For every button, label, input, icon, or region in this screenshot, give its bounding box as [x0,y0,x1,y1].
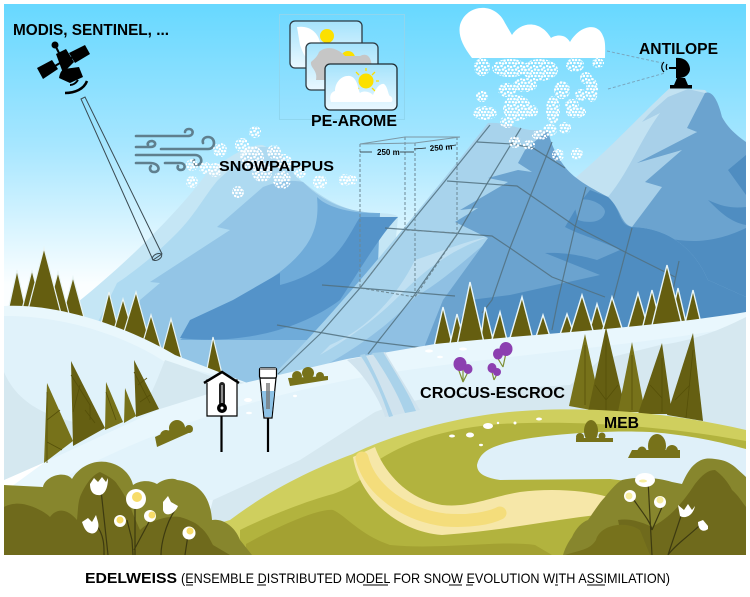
green meadow [213,409,746,555]
snow band [13,312,746,522]
central mountain [277,123,746,376]
wind icon [136,129,214,172]
grid cell 250 m box: 250 m [377,148,400,157]
bush cluster bottom left with flowers [4,462,252,555]
weather card: white cloud [325,64,397,110]
radar icon [662,58,692,88]
label: SNOWPAPPUS: SNOWPAPPUS [219,158,334,175]
far right mountain [576,88,746,297]
grid cell 250 m box [360,137,460,297]
weather card: sun and cloud [290,21,362,68]
bush cluster bottom right with flowers [563,459,746,555]
grid cell 250 m box: 250 m [430,142,453,153]
foreground trees: left [44,360,159,463]
tree row: centre [434,264,700,344]
foreground trees: right [569,327,703,421]
weather card: grey cloud [306,43,378,90]
satellite viewing cone [81,97,163,262]
satellite icon [37,42,90,93]
meltwater pool [477,432,746,484]
left mountain [80,145,398,382]
model grid lines [277,125,679,374]
label: satellites: MODIS, SENTINEL, ... [13,22,169,39]
tree row: left [8,247,222,372]
crocus flowers [454,342,512,382]
snow hill: left [4,306,250,480]
label: ANTILOPE: ANTILOPE [639,41,718,58]
cloud to radar link [607,51,665,89]
label: PE-AROME: PE-AROME [311,113,397,130]
label: CROCUS-ESCROC: CROCUS-ESCROC [420,385,565,402]
snow patches [244,348,542,446]
PE-AROME panel [280,14,404,120]
snow cloud [460,8,605,58]
falling snow [473,58,604,161]
label: MEB: MEB [604,415,639,432]
wind-blown snow [186,126,357,198]
thermometer shelter [204,372,239,452]
shrubs in snow [155,367,680,458]
rain gauge [260,368,276,452]
caption: (ENSEMBLE DISTRIBUTED MODEL FOR SNOW EVOLUTION WITH ASSIMILATION) [181,570,670,586]
caption: EDELWEISS [85,570,177,587]
sky [4,4,746,278]
